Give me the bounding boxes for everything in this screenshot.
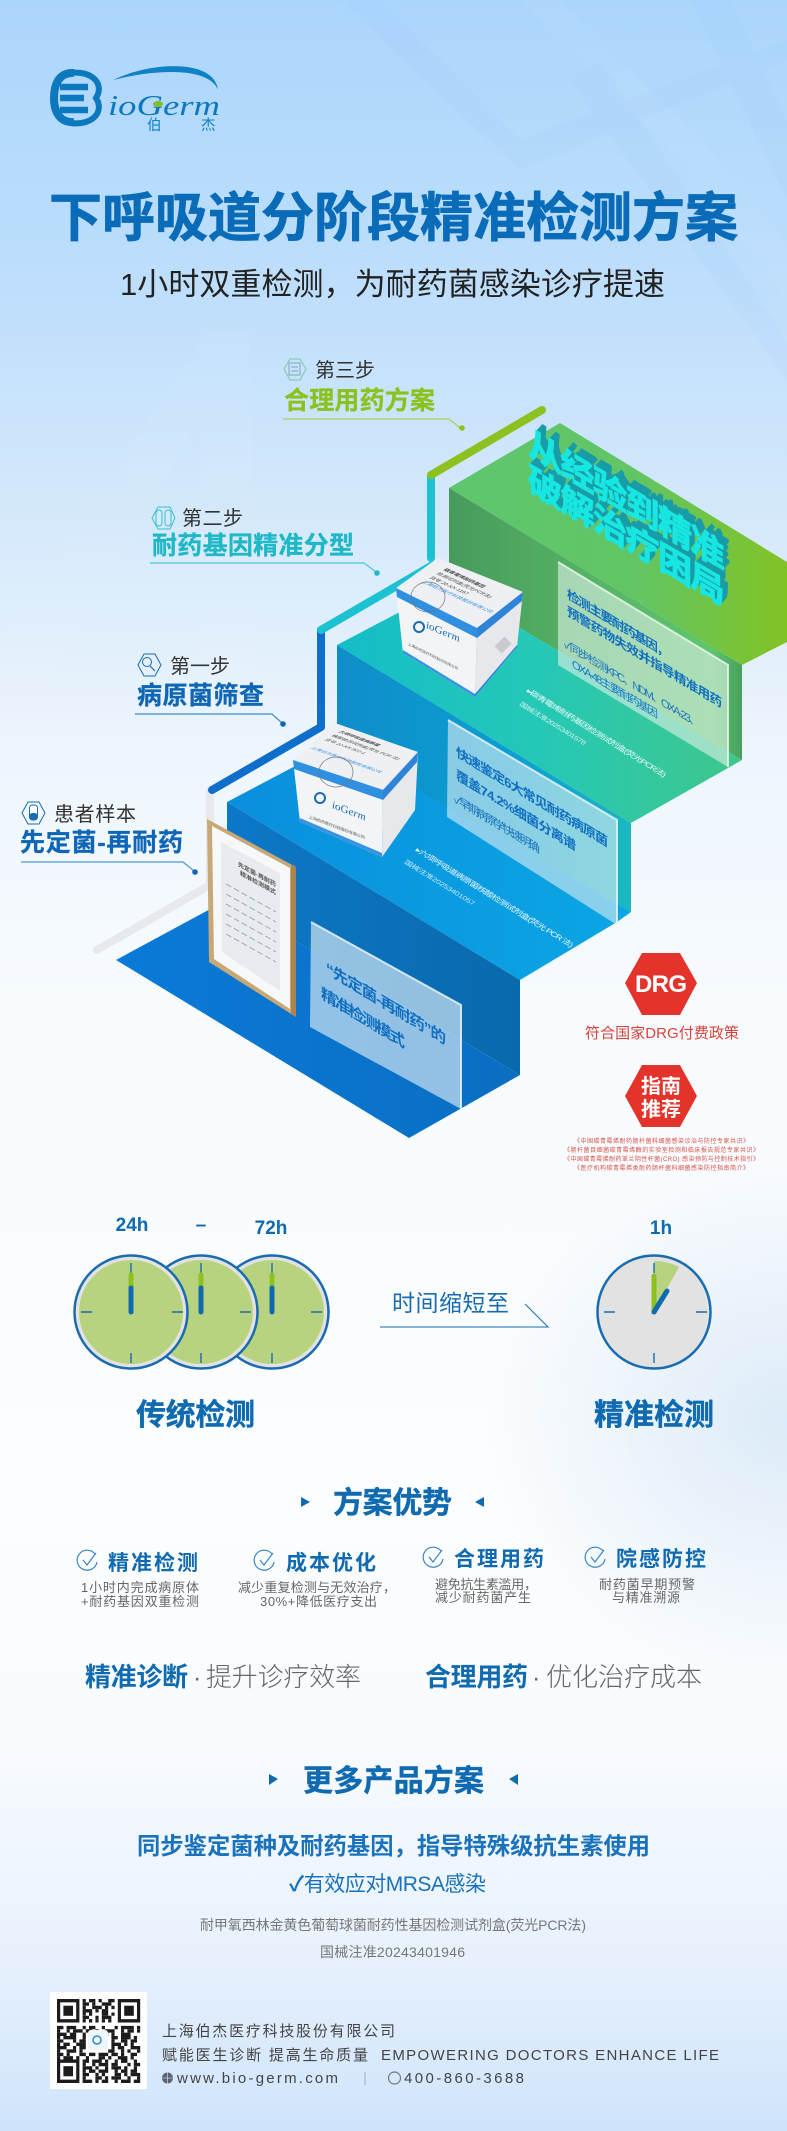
glass panel: mode: “先定菌-再耐药”的 (326, 958, 446, 1049)
guideline references: 《中国碳青霉烯耐药革兰阴性杆菌(CRO) 感染预防与控制技术指引》 (564, 1155, 759, 1163)
advantage: cost optimization: 减少重复检测与无效治疗， (238, 1580, 396, 1595)
step 1 label (135, 654, 286, 727)
contact: website and phone: 400-860-3688 (404, 2070, 524, 2087)
advantage: infection control: 与精准溯源 (612, 1590, 680, 1605)
slogan: diagnosis: · (193, 1664, 201, 1692)
slogan: diagnosis: 提升诊疗效率 (206, 1662, 361, 1692)
clock: 48h (144, 1256, 258, 1368)
advantage: cost optimization: 30%+降低医疗支出 (260, 1594, 377, 1609)
advantage: infection control (585, 1547, 706, 1605)
kit box: resistance gene kit: 货号:20-XX-1167 (427, 575, 472, 596)
kit box: six pathogen kit: 上海伯杰医疗科技股份有限公司 (308, 746, 384, 774)
advantage: precise detection (77, 1550, 199, 1609)
glass panel: pathogen identification (447, 720, 617, 925)
company name: 上海伯杰医疗科技股份有限公司 (162, 2023, 395, 2040)
patient sample label: 先定菌-再耐药 (20, 829, 183, 857)
glass panel: mode (310, 922, 461, 1109)
title: 下呼吸道分阶段精准检测方案 (49, 189, 738, 248)
product benefit: ✓有效应对MRSA感染 (289, 1873, 486, 1896)
clock labels: 72h (255, 1218, 287, 1239)
badge: DRG: DRG (635, 971, 687, 998)
path line: steps route (97, 410, 542, 950)
glass panel: gene typing: OXA-48主要耐药基因 (572, 657, 658, 721)
clock: 72h (216, 1256, 328, 1368)
kit box: six pathogen kit: ioGerm (332, 799, 366, 824)
kit box: resistance gene kit (396, 558, 523, 697)
clock: 24h (74, 1256, 188, 1368)
guideline references: 《医疗机构碳青霉烯类耐药肠杆菌科细菌感染防控指南简介》 (574, 1164, 749, 1172)
glass panel: gene typing: 检测主要耐药基因， (567, 586, 669, 662)
kit box: resistance gene kit: 上海伯杰医疗科技股份有限公司 (419, 579, 496, 614)
advantage: cost optimization: 成本优化 (286, 1551, 376, 1575)
floor text: six pathogen kit name: 国械注准20253401057 (403, 858, 477, 907)
advantage: rational drug use (423, 1547, 544, 1605)
badge: guideline recommendation: 推荐 (641, 1098, 681, 1121)
kit box: six pathogen kit: 货号:20-XX-902-1 (322, 738, 368, 755)
floor text: gene kit name: ▸碳青霉烯耐药基因检测试剂盒(荧光PCR法) (525, 687, 668, 779)
kit box: six pathogen kit: 核酸检测试剂盒(荧光 PCR 法) (329, 734, 402, 761)
logo: BioGerm: 伯杰 (147, 117, 216, 134)
stairs: step 1 blue (227, 744, 631, 1075)
product claim: 同步鉴定菌种及耐药基因，指导特殊级抗生素使用 (137, 1833, 650, 1859)
glass panel: mode: 精准检测模式 (321, 983, 405, 1052)
glass panel: gene typing: ✓同步检测KPC、NDM、OXA-23、 (564, 636, 700, 731)
step 3 label: 第三步 (315, 359, 375, 382)
QR code (50, 1992, 147, 2089)
glass panel: gene typing: 预警药物失效并指导精准用药 (567, 603, 722, 711)
stairs: step 3 green (449, 423, 787, 760)
step 2 label: 第二步 (182, 507, 243, 530)
advantage: precise detection: +耐药基因双重检测 (81, 1594, 199, 1609)
badge: guideline recommendation: 指南 (641, 1075, 681, 1098)
step 3 label (283, 359, 465, 431)
contact: website and phone: www.bio-germ.com (176, 2070, 338, 2087)
registration number: 国械注准20243401946 (320, 1944, 465, 1960)
arrow: time shortened: 时间缩短至 (392, 1290, 509, 1316)
slogan: treatment: · (532, 1664, 540, 1692)
guideline references: 《肠杆菌目细菌碳青霉烯酶的实验室检测和临床报告规范专家共识》 (564, 1146, 759, 1154)
logo: BioGerm: ioGerm (108, 91, 220, 122)
clock labels: 1h (650, 1218, 672, 1239)
badge: DRG: 符合国家DRG付费政策 (585, 1025, 739, 1042)
product name: 耐甲氧西林金黄色葡萄球菌耐药性基因检测试剂盒(荧光PCR法) (200, 1917, 586, 1933)
step 1 label: 病原菌筛查 (137, 682, 264, 710)
clock labels: – (196, 1215, 206, 1236)
3D headline: from experience to precision: 破解治疗困局 (528, 460, 723, 613)
step 2 label (150, 507, 380, 576)
advantage: rational drug use: 减少耐药菌产生 (435, 1590, 531, 1605)
badge: guideline recommendation (625, 1065, 697, 1127)
kit box: resistance gene kit: 上海伯杰医疗科技股份有限公司 (408, 641, 458, 671)
guideline references (564, 1137, 759, 1172)
framed document (207, 819, 296, 1017)
section heading: more products: 更多产品方案 (303, 1765, 484, 1798)
slogan: treatment: 优化治疗成本 (546, 1662, 702, 1692)
kit box: six pathogen kit (293, 723, 418, 857)
glass panel: pathogen identification: ✓早期病原学快速明确 (454, 791, 540, 856)
patient sample label: 患者样本 (54, 803, 136, 826)
floor text: gene kit name: 国械注准20253401578 (518, 700, 588, 747)
arrow: time shortened (380, 1290, 548, 1327)
badge: DRG (585, 953, 739, 1042)
clock labels: 24h (116, 1215, 148, 1236)
subtitle: 1小时双重检测，为耐药菌感染诊疗提速 (120, 267, 665, 302)
framed document: 先定菌-再耐药 (238, 859, 276, 889)
floor text: six pathogen kit name: ▸六项呼吸道病原菌核酸检测试剂盒(荧光 PCR 法) (414, 846, 575, 949)
slogan: diagnosis (85, 1662, 361, 1692)
glass panel: pathogen identification: 覆盖74.2%细菌分离谱 (456, 767, 576, 854)
slogan: footer: 赋能医生诊断 提高生命质量 (162, 2046, 368, 2064)
glass panel: gene typing (558, 562, 728, 767)
heading: precise detection: 精准检测 (594, 1399, 714, 1432)
kit box: six pathogen kit: 上海伯杰医疗科技股份有限公司 (309, 813, 365, 840)
slogan: footer (162, 2046, 719, 2064)
slogan: treatment (425, 1662, 702, 1692)
stairs: floor (116, 900, 520, 1138)
advantage: precise detection: 精准检测 (108, 1551, 198, 1575)
advantage: infection control: 院感防控 (616, 1547, 706, 1571)
slogan: footer: EMPOWERING DOCTORS ENHANCE LIFE (381, 2047, 719, 2064)
kit box: resistance gene kit: 碳青霉烯耐药基因 (441, 567, 488, 589)
advantage: precise detection: 1小时内完成病原体 (81, 1580, 199, 1595)
advantage: rational drug use: 避免抗生素滥用， (435, 1577, 537, 1592)
advantage: rational drug use: 合理用药 (454, 1548, 544, 1571)
contact: website and phone (162, 2070, 524, 2087)
slogan: diagnosis: 精准诊断 (85, 1662, 188, 1692)
framed document: 精准检测模式 (240, 868, 276, 897)
stairs: step 2 teal (337, 586, 742, 912)
3D headline: from experience to precision: 从经验到精准 (528, 424, 723, 577)
glass panel: pathogen identification: 快速鉴定6大常见耐药病原菌 (456, 744, 608, 850)
patient sample label (20, 802, 198, 875)
guideline references: 《中国碳青霉烯耐药肠杆菌科细菌感染诊治与防控专家共识》 (574, 1137, 749, 1145)
heading: traditional detection: 传统检测 (136, 1399, 255, 1432)
kit box: resistance gene kit: 检测试剂盒(荧光PCR法) (434, 571, 495, 599)
section heading: advantages (301, 1487, 484, 1520)
section heading: advantages: 方案优势 (333, 1487, 452, 1520)
step 1 label: 第一步 (170, 655, 230, 678)
step 2 label: 耐药基因精准分型 (152, 532, 354, 560)
advantage: cost optimization (238, 1550, 396, 1609)
slogan: treatment: 合理用药 (425, 1662, 528, 1692)
clock: 1h (598, 1256, 710, 1368)
kit box: six pathogen kit: 六项呼吸道病原菌 (336, 730, 382, 747)
advantage: infection control: 耐药菌早期预警 (599, 1577, 695, 1592)
step 3 label: 合理用药方案 (284, 386, 435, 415)
kit box: resistance gene kit: ioGerm (426, 619, 460, 645)
clock labels (116, 1215, 672, 1239)
logo: BioGerm (54, 66, 220, 134)
